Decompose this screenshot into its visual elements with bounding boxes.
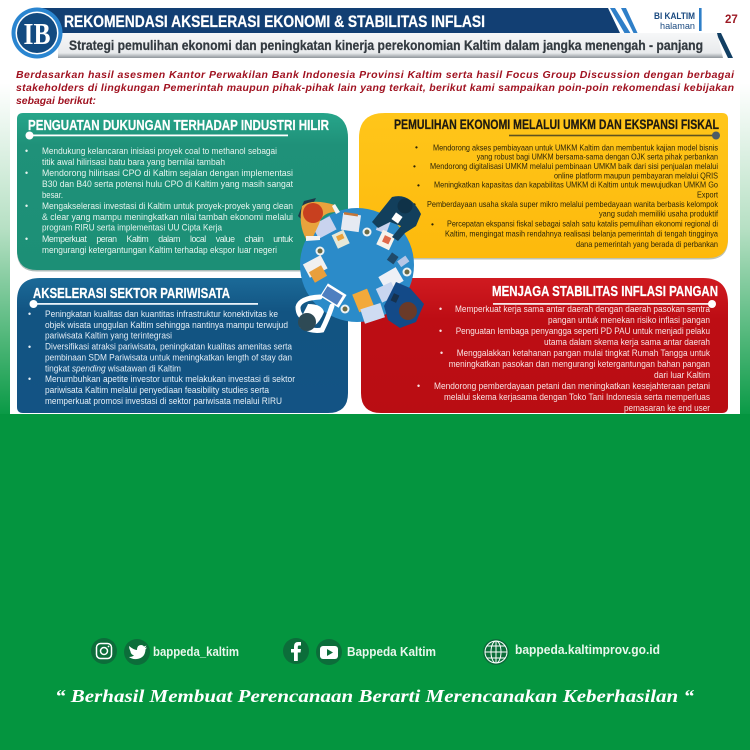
bullet list: • — [25, 168, 28, 178]
bullet list — [413, 142, 719, 249]
logo: IB — [24, 16, 50, 51]
bullet list — [417, 304, 711, 413]
bullet list: dari luar Kaltim — [654, 370, 710, 380]
bullet list: objek wisata unggulan Kaltim sehingga nantinya mampu terwujud — [45, 320, 288, 330]
bullet list: Kaltim, mengingat masih rendahnya realisasi belanja pemerintah di tengah tingginya — [445, 229, 718, 239]
panel: stabilitas inflasi pangan — [361, 278, 728, 413]
bullet list: Diversifikasi atraksi pariwisata, peningkatan kualitas amenitas serta — [45, 342, 292, 352]
title bar — [40, 8, 620, 33]
bullet list: • — [413, 199, 416, 209]
bullet list: • — [25, 201, 28, 211]
bullet list: memperkuat promosi investasi di sektor pariwisata melalui RIRU — [45, 396, 282, 406]
social: website: bappeda.kaltimprov.go.id — [515, 643, 660, 657]
bullet list: • — [431, 219, 434, 229]
bullet list: Mendorong digitalisasi UMKM melalui pembinaan UMKM baik dari sisi penjualan melalui — [430, 161, 718, 171]
bullet list: • — [28, 342, 31, 352]
bullet list: program RIRU serta implementasi UU Cipta Kerja — [42, 222, 222, 232]
bullet list: Memperkuat peran Kaltim dalam local value chain untuk — [42, 234, 294, 244]
person: bottom right — [384, 282, 424, 328]
bullet list: Mendukung kelancaran inisiasi proyek coal to methanol sebagai — [42, 146, 277, 156]
bullet list: tingkat spending wisatawan di Kaltim — [45, 364, 181, 374]
intro paragraph: stakeholders di lingkungan Pemerintah maupun pihak-pihak lain yang terkait, berikut kami sampaikan poin-poin rekomendasi kebijakan — [16, 82, 734, 94]
header stripes — [610, 8, 733, 58]
header banner — [12, 8, 733, 58]
person: bottom left — [298, 297, 332, 331]
bullet list: • — [440, 348, 443, 358]
bullet list: Memperkuat kerja sama antar daerah dengan daerah pasokan sentra — [455, 304, 710, 314]
bullet list: • — [25, 146, 28, 156]
heading rule — [30, 300, 258, 308]
bullet list: Menumbuhkan apetite investor untuk melakukan investasi di sektor — [45, 374, 295, 384]
logo — [12, 8, 62, 58]
table top — [300, 208, 414, 322]
bullet list — [28, 309, 295, 406]
social: facebook icon — [283, 638, 309, 664]
bullet list: pariwisata Kaltim melalui penyediaan feasibility studies serta — [45, 385, 269, 395]
page label — [654, 8, 702, 32]
bullet list: Mendorong pemberdayaan petani dan meningkatkan kesejahteraan petani — [434, 381, 710, 391]
bullet list: pangan untuk menekan risiko inflasi pangan — [548, 315, 710, 325]
heading: AKSELERASI SEKTOR PARIWISATA — [33, 285, 230, 302]
social: globe icon — [483, 639, 509, 665]
page number: 27 — [725, 14, 738, 26]
panel: UMKM dan ekspansi fiskal — [359, 113, 728, 260]
bullet list: • — [28, 309, 31, 319]
bullet list: pembinaan SDM Pariwisata untuk meningkatkan length of stay dan — [45, 352, 292, 362]
subtitle bar — [58, 33, 723, 58]
title: REKOMENDASI AKSELERASI EKONOMI & STABILITAS INFLASI — [64, 12, 485, 31]
bullet list: pariwisata Kaltim yang terintegrasi — [45, 330, 172, 340]
social: youtube name: Bappeda Kaltim — [347, 645, 436, 659]
bullet list: B30 dan B40 serta potensi hulu CPO di Kaltim yang masih sangat — [42, 179, 294, 189]
intro paragraph — [16, 69, 735, 107]
bullet list: • — [439, 304, 442, 314]
page label: BI KALTIM — [654, 11, 695, 22]
social: instagram icon — [91, 638, 117, 664]
bullet list: • — [413, 161, 416, 171]
bullet list: titik awal hilirisasi batu bara yang bernilai tambah — [42, 157, 225, 167]
bullet list: Penguatan lembaga penyangga seperti PD PAU untuk menjadi pelaku — [456, 326, 710, 336]
heading: PENGUATAN DUKUNGAN TERHADAP INDUSTRI HILIR — [28, 117, 329, 134]
person: top left — [298, 198, 340, 241]
social: twitter handle: bappeda_kaltim — [153, 645, 239, 659]
documents on the table — [303, 212, 409, 324]
bullet list: Meningkatkan kapasitas dan kapabilitas UMKM di Kaltim untuk mewujudkan UMKM Go — [434, 180, 718, 190]
bullet list: online platform maupun pembayaran melalui QRIS — [554, 170, 718, 180]
bullet list: Mendorong akses pembiayaan untuk UMKM Kaltim dan membentuk kajian model bisnis — [433, 142, 718, 152]
heading rule — [26, 132, 288, 140]
bullet list: Mendorong hilirisasi CPO di Kaltim sejalan dengan implementasi — [42, 168, 293, 178]
illustration: round meeting table — [298, 196, 424, 331]
bullet list: • — [25, 234, 28, 244]
bullet list: melalui skema kerjasama dengan Toko Tani Indonesia serta memperluas — [444, 392, 711, 402]
bullet list: Export — [697, 190, 719, 200]
heading rule — [493, 300, 716, 308]
panel: pariwisata — [17, 278, 348, 413]
bullet list: besar. — [42, 190, 63, 200]
heading rule — [509, 132, 720, 140]
social: youtube icon — [316, 639, 342, 665]
bullet list: Peningkatan kualitas dan kuantitas infrastruktur konektivitas ke — [45, 309, 278, 319]
bullet list: Pemberdayaan usaha skala super mikro melalui pembedayaan wanita berbasis kelompok — [427, 199, 719, 209]
bullet list — [25, 146, 294, 255]
bullet list: mengurangi ketergantungan Kaltim terhadap ekspor luar negeri — [42, 245, 277, 255]
bullet list: • — [439, 326, 442, 336]
bullet list: • — [417, 381, 420, 391]
bullet list: pemasaran ke end user — [624, 403, 710, 413]
bullet list: meningkatkan pasokan dan mengurangi ketergantungan bahan pangan — [449, 359, 710, 369]
bullet list: • — [28, 374, 31, 384]
panel: industri hilir — [17, 113, 348, 272]
bullet list: • — [417, 180, 420, 190]
page label: halaman — [660, 21, 695, 32]
bullet list: Menggalakkan ketahanan pangan mulai tingkat Rumah Tangga untuk — [457, 348, 711, 358]
coffee cups — [316, 228, 412, 314]
intro paragraph: sebagai berikut: — [16, 95, 96, 107]
bullet list: Mengakselerasi investasi di Kaltim untuk proyek-proyek yang clean — [42, 201, 293, 211]
bullet list: dana pemerintah yang berada di perbankan — [576, 239, 718, 249]
bullet list: & clear yang mampu meningkatkan nilai tambah ekonomi melalui — [42, 212, 293, 222]
white content area — [0, 0, 750, 414]
person: top right — [372, 196, 421, 241]
bullet list: yang sudah memiliki usaha produktif — [599, 209, 719, 219]
intro paragraph: Berdasarkan hasil asesmen Kantor Perwakilan Bank Indonesia Provinsi Kaltim serta hasil Focus Group Discussion dengan berbagai — [16, 69, 735, 81]
bullet list: utama dalam skema kerja sama antar daerah — [544, 337, 710, 347]
social: twitter icon — [124, 639, 150, 665]
slogan: “ Berhasil Membuat Perencanaan Berarti Merencanakan Keberhasilan “ — [55, 686, 694, 706]
bullet list: • — [415, 142, 418, 152]
